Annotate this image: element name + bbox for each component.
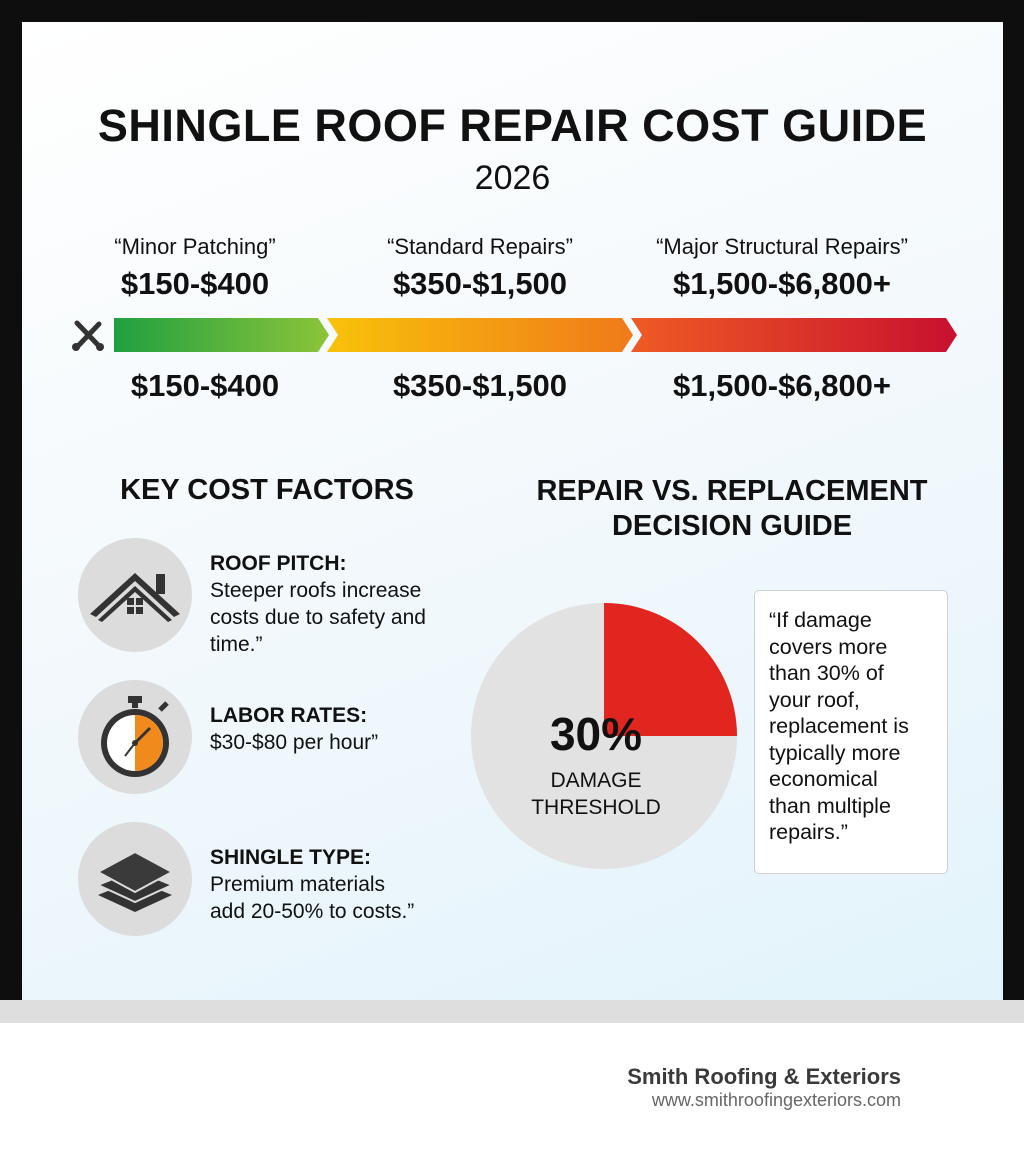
tier labels: “Major Structural Repairs” xyxy=(656,234,908,259)
factor: labor rates xyxy=(78,680,378,794)
heading: key cost factors: KEY COST FACTORS xyxy=(120,474,414,506)
subtitle year: 2026 xyxy=(475,159,550,197)
bottom price labels: $150-$400 xyxy=(131,368,279,403)
tier labels: $350-$1,500 xyxy=(393,266,567,301)
pie chart: 30% damage threshold xyxy=(471,603,737,869)
text: Steeper roofs increase costs due to safety and time.” xyxy=(210,579,426,656)
heading: repair vs replacement: REPAIR VS. REPLACEMENT xyxy=(536,475,928,507)
tier labels xyxy=(114,234,908,301)
callout quote: “If damage covers more than 30% of your roof, replacement is typically more economical than multiple repairs.” xyxy=(769,608,909,844)
icon: tools xyxy=(72,320,104,351)
factor: shingle type xyxy=(78,822,414,936)
factor: roof pitch xyxy=(78,538,426,656)
icon: house xyxy=(78,538,192,652)
pie chart: 30% damage threshold: THRESHOLD xyxy=(531,796,661,819)
tier labels: $1,500-$6,800+ xyxy=(673,266,891,301)
tier labels: “Minor Patching” xyxy=(114,234,276,259)
footer: company xyxy=(627,1064,901,1110)
heading: repair vs replacement: DECISION GUIDE xyxy=(612,510,852,542)
text xyxy=(210,846,414,923)
gray band xyxy=(0,1000,1024,1023)
text: ROOF PITCH: xyxy=(210,552,346,575)
bottom price labels: $1,500-$6,800+ xyxy=(673,368,891,403)
text: SHINGLE TYPE: xyxy=(210,846,371,869)
icon: shingle layers xyxy=(78,822,192,936)
tier labels: $150-$400 xyxy=(121,266,269,301)
text xyxy=(210,704,378,754)
tier labels: “Standard Repairs” xyxy=(387,234,573,259)
bottom price labels xyxy=(131,368,891,403)
callout quote xyxy=(754,590,948,874)
bottom price labels: $350-$1,500 xyxy=(393,368,567,403)
footer: company: Smith Roofing & Exteriors xyxy=(627,1064,901,1089)
heading: repair vs replacement xyxy=(536,475,928,542)
pie chart: 30% damage threshold: DAMAGE xyxy=(550,769,642,792)
text: Premium materials add 20-50% to costs.” xyxy=(210,873,414,923)
cost gradient bar xyxy=(114,318,957,352)
text: LABOR RATES: xyxy=(210,704,367,727)
title: SHINGLE ROOF REPAIR COST GUIDE xyxy=(98,100,927,151)
text: $30-$80 per hour” xyxy=(210,731,378,754)
icon: stopwatch xyxy=(78,680,192,794)
pie chart: 30% damage threshold: 30% xyxy=(550,708,642,760)
footer: company: www.smithroofingexteriors.com xyxy=(652,1090,901,1110)
